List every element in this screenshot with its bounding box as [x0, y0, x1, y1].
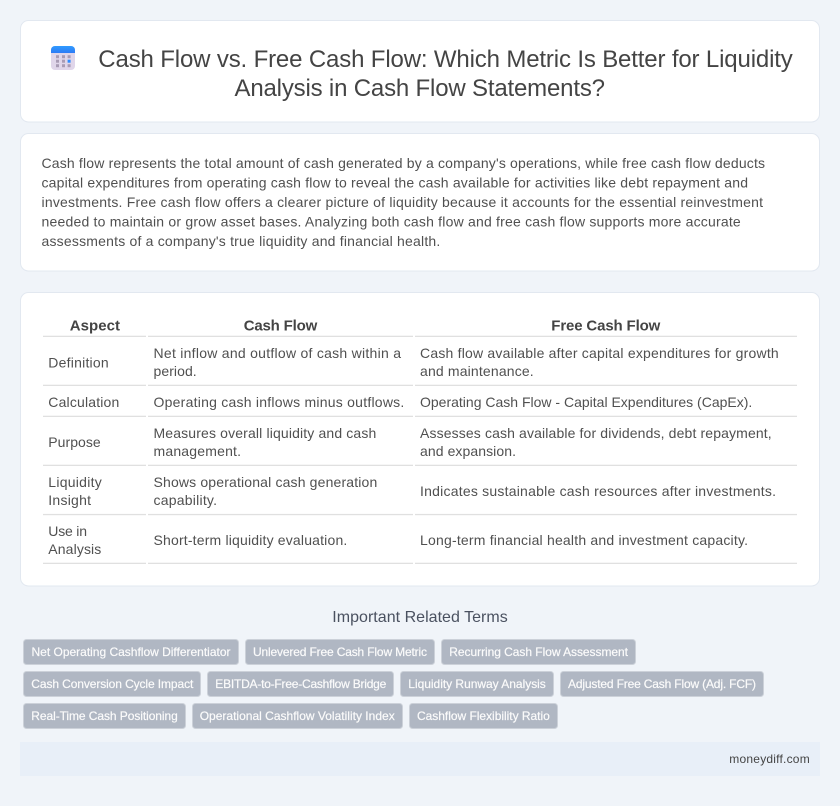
table header row — [70, 318, 661, 335]
row: definition: and maintenance. — [420, 363, 534, 379]
row: liquidity insight — [48, 474, 776, 508]
row: calculation: Calculation — [48, 394, 119, 410]
row: purpose: management. — [154, 443, 241, 459]
table header row: Aspect — [70, 318, 120, 335]
row: use in analysis: Short-term liquidity evaluation. — [154, 532, 347, 548]
related terms tags: Adjusted Free Cash Flow (Adj. FCF) — [568, 677, 756, 691]
intro paragraph — [42, 155, 765, 249]
related terms tags: Unlevered Free Cash Flow Metric — [253, 645, 427, 659]
title: Cash Flow vs. Free Cash Flow: Which Metric Is Better for Liquidity — [98, 46, 793, 73]
row: purpose — [48, 425, 772, 459]
row: use in analysis: Analysis — [48, 541, 101, 557]
row: definition: Net inflow and outflow of cash within a — [154, 345, 401, 361]
row: purpose: Measures overall liquidity and cash — [154, 425, 376, 441]
row: purpose: Purpose — [48, 434, 101, 450]
intro paragraph: assessments of a company's true liquidity and financial health. — [42, 233, 440, 249]
footer: moneydiff.com — [729, 752, 810, 766]
title: Analysis in Cash Flow Statements? — [234, 75, 605, 102]
related terms tags: Net Operating Cashflow Differentiator — [32, 645, 230, 659]
related terms tags: Liquidity Runway Analysis — [408, 677, 546, 691]
row: use in analysis: Long-term financial health and investment capacity. — [420, 532, 748, 548]
row: calculation: Operating cash inflows minus outflows. — [154, 394, 404, 410]
row: calculation: Operating Cash Flow - Capital Expenditures (CapEx). — [420, 394, 752, 410]
icon: calendar — [51, 46, 75, 70]
related terms tags: Cash Conversion Cycle Impact — [31, 677, 194, 691]
row: liquidity insight: Shows operational cash generation — [154, 474, 377, 490]
title — [98, 46, 793, 102]
heading: important related terms: Important Related Terms — [332, 609, 508, 626]
panel: intro text — [20, 134, 820, 271]
intro paragraph: needed to maintain or grow asset bases. Analyzing both cash flow and free cash flow supports more accurate — [42, 214, 741, 230]
related terms tags — [24, 640, 764, 728]
row: use in analysis — [48, 523, 748, 557]
intro paragraph: investments. Free cash flow offers a clearer picture of liquidity because it accounts for the essential reinvestment — [42, 194, 763, 210]
related terms tags: Operational Cashflow Volatility Index — [200, 709, 395, 723]
row: liquidity insight: Liquidity — [48, 474, 102, 490]
row: definition: period. — [154, 363, 197, 379]
row: definition: Cash flow available after capital expenditures for growth — [420, 345, 779, 361]
row: purpose: and expansion. — [420, 443, 516, 459]
row: liquidity insight: Insight — [48, 492, 91, 508]
footer — [20, 742, 820, 776]
panel: header — [20, 20, 820, 122]
row: liquidity insight: capability. — [154, 492, 217, 508]
row: definition: Definition — [48, 354, 109, 370]
row: purpose: Assesses cash available for dividends, debt repayment, — [420, 425, 772, 441]
panel: comparison table — [20, 292, 820, 586]
row: liquidity insight: Indicates sustainable cash resources after investments. — [420, 483, 776, 499]
related terms tags: EBITDA-to-Free-Cashflow Bridge — [215, 677, 387, 691]
related terms tags: Real-Time Cash Positioning — [31, 709, 178, 723]
row: calculation — [48, 394, 752, 410]
intro paragraph: Cash flow represents the total amount of cash generated by a company's operations, while free cash flow deducts — [42, 155, 765, 171]
related terms tags: Recurring Cash Flow Assessment — [449, 645, 629, 659]
related terms tags: Cashflow Flexibility Ratio — [417, 709, 550, 723]
row: definition — [48, 345, 779, 379]
table header row: Free Cash Flow — [551, 318, 661, 335]
intro paragraph: capital expenditures from operating cash flow to reveal the cash available for activities like debt repayment and — [42, 175, 748, 191]
row: use in analysis: Use in — [48, 523, 87, 539]
table header row: Cash Flow — [244, 318, 318, 335]
